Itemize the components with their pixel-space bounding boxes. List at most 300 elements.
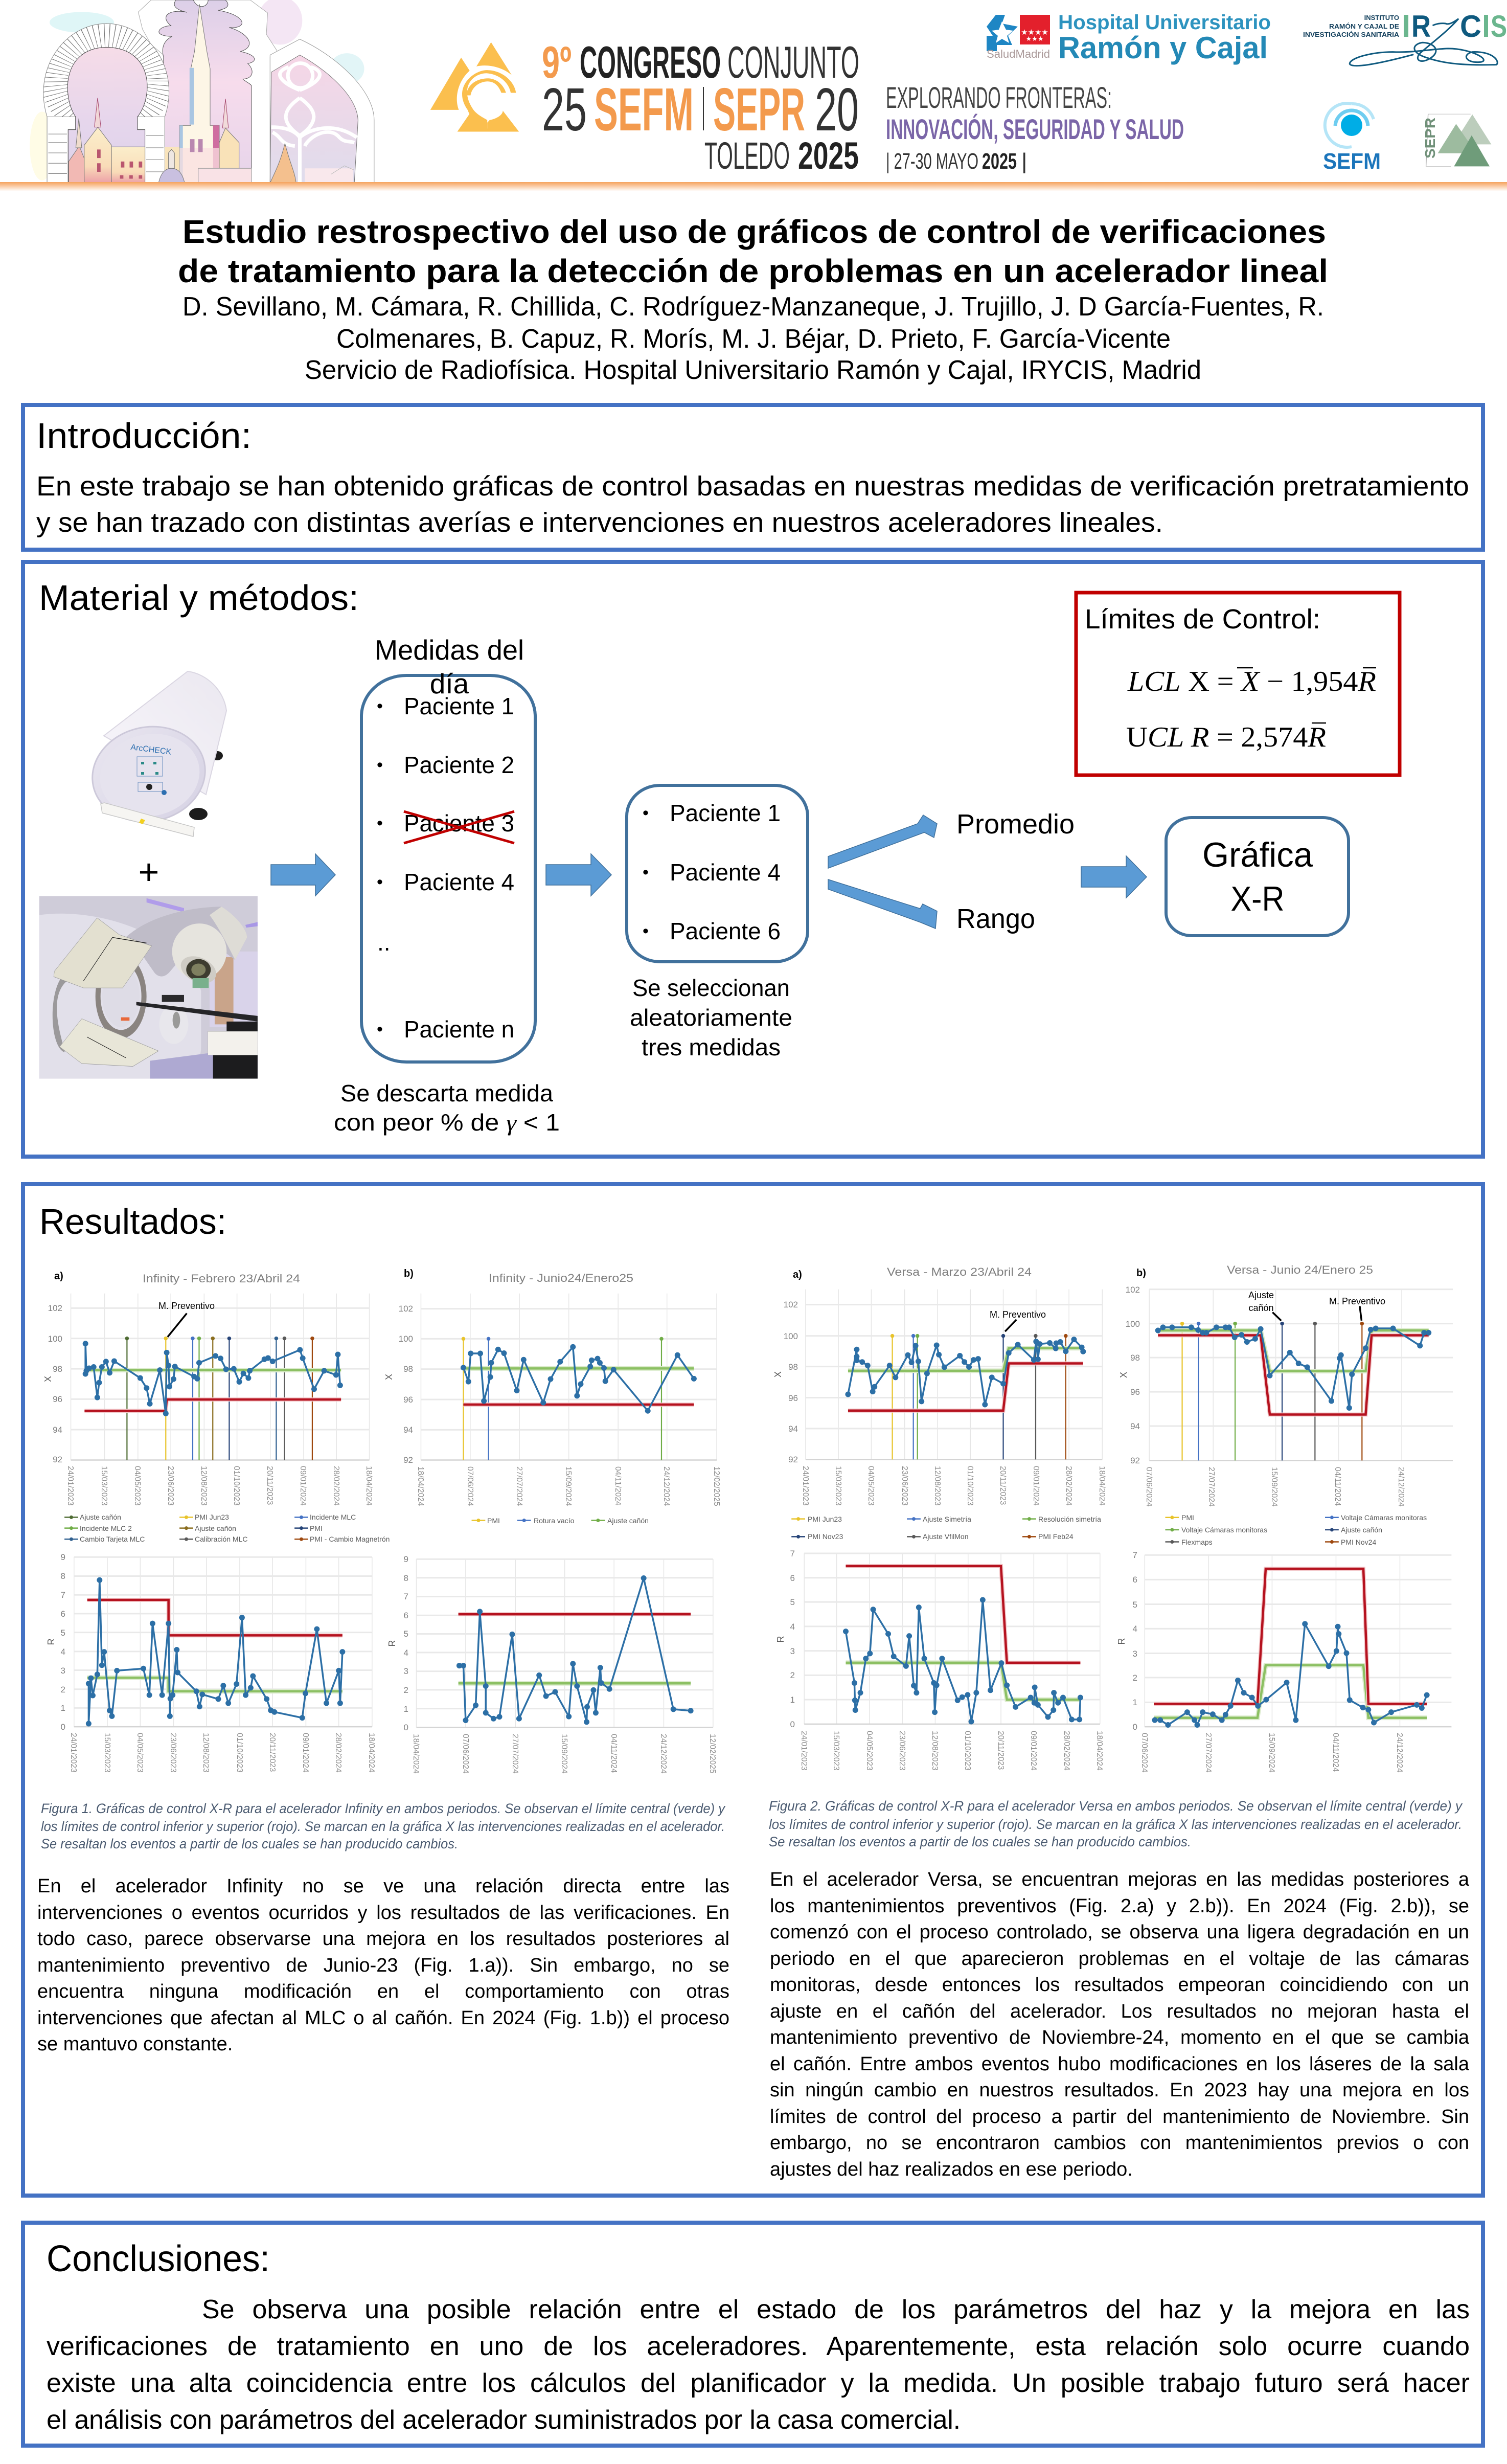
y axis labels <box>61 1552 65 1732</box>
panel letter: b) <box>1136 1268 1146 1279</box>
chart: Infinity R, febrero 23 / abril 24 <box>46 1552 376 1773</box>
logo: Hospital Ramón y Cajal: ★★★ <box>1026 35 1043 42</box>
text: introducción body: y se han trazado con distintas averías e intervenciones en nuestros aceleradores lineales. <box>36 507 1163 538</box>
caption: se descarta: con peor % de γ < 1 <box>334 1109 560 1136</box>
axis title: X <box>384 1374 394 1380</box>
x axis labels: 15/09/2024 <box>564 1466 573 1506</box>
congress theme: EXPLORANDO FRONTERAS: <box>886 81 1112 115</box>
plot <box>64 1294 370 1539</box>
plot <box>791 1290 1102 1536</box>
text: resultados Infinity: intervenciones que afectan al MLC o al cañón. En 2024 (Fig. 1.b)) el proceso <box>37 2007 729 2029</box>
axis title: R <box>775 1636 786 1642</box>
plot <box>74 1557 372 1727</box>
panel: conclusiones <box>23 2223 1483 2446</box>
chart title: Versa - Junio 24/Enero 25 <box>1227 1263 1373 1276</box>
x axis labels: 12/08/2023 <box>199 1466 208 1506</box>
y axis labels: 3 <box>790 1646 795 1656</box>
congress name <box>542 37 859 177</box>
text: resultados Infinity: intervenciones o eventos ocurridos y los resultados de las verificaciones. En <box>37 1902 729 1924</box>
congress theme <box>886 81 1184 174</box>
annotations: M. Preventivo <box>1329 1296 1385 1306</box>
orange divider band <box>0 182 1507 191</box>
caption: selección aleatoria <box>630 975 792 1060</box>
chart title: Infinity - Febrero 23/Abril 24 <box>143 1272 300 1285</box>
text: introducción body <box>36 471 1469 538</box>
authors <box>182 292 1324 385</box>
x axis labels: 07/06/2024 <box>1140 1733 1149 1773</box>
y axis labels: 98 <box>788 1362 798 1372</box>
caption: selección aleatoria: Se seleccionan <box>632 975 790 1001</box>
x axis labels: 12/08/2023 <box>201 1733 210 1773</box>
y axis labels: 0 <box>61 1722 65 1732</box>
caption: selección aleatoria: aleatoriamente <box>630 1004 792 1031</box>
x axis labels: 01/10/2023 <box>963 1731 972 1771</box>
y axis labels: 4 <box>61 1647 65 1657</box>
arrow: to rango <box>828 879 937 929</box>
x axis labels: 04/05/2023 <box>865 1731 874 1771</box>
x axis labels <box>416 1466 721 1506</box>
plot <box>417 1559 713 1727</box>
list items: Paciente 1 <box>404 693 514 719</box>
logo: IRYCIS: INSTITUTO <box>1364 14 1399 21</box>
x axis labels: 15/03/2023 <box>100 1466 108 1506</box>
x axis labels: 20/11/2023 <box>996 1731 1005 1770</box>
y axis labels: 96 <box>788 1393 798 1403</box>
legend: Cambio Tarjeta MLC <box>80 1535 145 1543</box>
legend: PMI Jun23 <box>195 1513 229 1521</box>
y axis labels: 92 <box>788 1455 798 1464</box>
legend: Rotura vacío <box>534 1517 575 1525</box>
list items: Paciente 2 <box>404 752 514 778</box>
y axis labels: 2 <box>61 1685 65 1694</box>
y axis labels: 100 <box>399 1334 413 1344</box>
legend: PMI Nov24 <box>1341 1538 1376 1546</box>
y axis labels: 3 <box>61 1666 65 1676</box>
logo: IRYCIS: C <box>1460 9 1481 43</box>
y axis labels: 92 <box>403 1455 413 1465</box>
x axis labels: 28/02/2024 <box>334 1733 342 1773</box>
x axis labels <box>800 1731 1104 1771</box>
x axis labels: 23/06/2023 <box>166 1466 175 1506</box>
congress name: CONJUNTO <box>727 37 859 87</box>
y axis labels: 6 <box>790 1573 795 1583</box>
icon: ArcCHECK phantom: ArcCHECK <box>130 743 172 757</box>
list items: .. <box>377 929 391 956</box>
label: rango: Rango <box>956 903 1035 934</box>
box: gráfica X-R: X-R <box>1231 879 1284 918</box>
plus sign: + <box>139 852 159 892</box>
caption: figura 1: Figura 1. Gráficas de control X-R para el acelerador Infinity en ambos periodos. Se observan el límite central (verde) y <box>41 1801 725 1816</box>
panel: introducción <box>23 405 1483 550</box>
y axis labels: 100 <box>784 1331 798 1341</box>
text: introducción body: En este trabajo se han obtenido gráficas de control basadas en nuestras medidas de verificación pretratamiento <box>36 471 1469 502</box>
y axis labels <box>404 1554 408 1732</box>
heading: resultados: Resultados: <box>39 1202 226 1241</box>
y axis labels: 1 <box>404 1704 408 1714</box>
caption: figura 1: los límites de control inferior y superior (rojo). Se marcan en la gráfica X las intervenciones realizadas en el acelerador. <box>41 1819 725 1834</box>
formula: UCL: UCL R = 2,574R <box>1126 721 1326 753</box>
list items: Paciente 4 <box>404 869 514 895</box>
caption: se descarta <box>334 1080 560 1136</box>
list: patient measurements <box>361 668 535 1062</box>
x axis labels: 04/05/2023 <box>866 1466 875 1506</box>
plot <box>421 1294 717 1521</box>
panel: resultados <box>23 1184 1483 2196</box>
logo: Hospital Ramón y Cajal: Hospital Universitario <box>1058 11 1271 34</box>
x axis labels: 18/04/2024 <box>416 1466 425 1506</box>
legend: Incidente MLC <box>310 1513 356 1521</box>
y axis labels <box>1126 1285 1140 1465</box>
text: conclusiones body: Se observa una posible relación entre el estado de los parámetros del haz y la mejora en las <box>202 2295 1470 2324</box>
y axis labels <box>48 1303 62 1464</box>
plot <box>804 1553 1100 1724</box>
x axis labels: 18/04/2024 <box>367 1733 376 1773</box>
y axis labels: 1 <box>1133 1698 1137 1707</box>
text: resultados Versa: límites de control del proceso a partir del mantenimiento de Noviembre. Sin <box>770 2106 1469 2127</box>
text: resultados Infinity: encuentra ninguna modificación en el comportamiento con otras <box>37 1981 729 2002</box>
logo: Hospital Ramón y Cajal: Ramón y Cajal <box>1058 31 1268 65</box>
y axis labels: 6 <box>61 1609 65 1619</box>
x axis labels: 27/07/2024 <box>511 1734 519 1774</box>
y axis labels: 92 <box>1130 1456 1140 1465</box>
icon: red cross over Paciente 3 <box>404 811 514 843</box>
y axis labels: 94 <box>1130 1421 1140 1431</box>
legend: Incidente MLC 2 <box>80 1524 132 1532</box>
y axis labels: 2 <box>1133 1673 1137 1683</box>
legend <box>80 1513 390 1543</box>
x axis labels <box>1140 1733 1404 1773</box>
congress name: SEFM <box>594 76 694 144</box>
illustration: Toledo skyline in gothic arches <box>30 0 374 183</box>
list items: Paciente 3 <box>404 810 514 837</box>
text: resultados Infinity: En el acelerador Infinity no se ve una relación directa entre las <box>37 1875 729 1897</box>
text: resultados Infinity: mantenimiento preventivo de Junio-23 (Fig. 1.a)). Sin embargo, no se <box>37 1954 729 1976</box>
x axis labels: 24/01/2023 <box>801 1466 810 1506</box>
y axis labels: 96 <box>53 1394 62 1404</box>
y axis labels: 94 <box>403 1425 413 1435</box>
text: resultados Versa: embargo, no se encontraron cambios con mantenimientos previos o con <box>770 2132 1469 2154</box>
x axis labels: 23/06/2023 <box>900 1466 909 1506</box>
legend: Voltaje Cámaras monitoras <box>1181 1526 1267 1534</box>
legend: Ajuste cañón <box>607 1517 649 1525</box>
authors: Colmenares, B. Capuz, R. Morís, M. J. Béjar, D. Prieto, F. García-Vicente <box>336 324 1171 354</box>
x axis labels: 04/11/2024 <box>613 1466 622 1506</box>
axis title: R <box>46 1638 56 1645</box>
legend: PMI - Cambio Magnetrón <box>310 1535 390 1543</box>
x axis labels: 24/12/2024 <box>1395 1733 1404 1773</box>
heading: material y métodos: Material y métodos: <box>39 578 359 618</box>
y axis labels: 4 <box>790 1622 795 1632</box>
y axis labels: 98 <box>53 1364 62 1374</box>
y axis labels: 3 <box>404 1666 408 1676</box>
congress theme: | <box>1021 149 1027 174</box>
y axis labels: 4 <box>404 1648 408 1658</box>
x axis labels: 04/11/2024 <box>1333 1467 1342 1506</box>
list items: Paciente n <box>404 1016 514 1043</box>
arrow <box>546 854 611 896</box>
y axis labels: 102 <box>1126 1285 1140 1295</box>
y axis labels: 96 <box>403 1395 413 1405</box>
annotation: M. Preventivo <box>158 1301 215 1311</box>
panel: material y métodos <box>23 562 1483 1157</box>
title <box>178 213 1328 289</box>
caption: figura 2: Se resaltan los eventos a partir de los cuales se han producido cambios. <box>769 1834 1191 1849</box>
x axis labels: 07/06/2024 <box>461 1734 470 1774</box>
caption: figura 2: Figura 2. Gráficas de control X-R para el acelerador Versa en ambos periodos. Se observan el límite central (verde) y <box>769 1798 1463 1814</box>
header banner <box>0 0 1507 191</box>
text: conclusiones body: existe una alta coincidencia entre los cálculos del planificador y la medida. Un posible trabajo futuro será hacer <box>47 2368 1470 2398</box>
title: de tratamiento para la detección de problemas en un acelerador lineal <box>178 253 1328 289</box>
panel letter: b) <box>404 1268 414 1279</box>
caption: figura 1: Se resaltan los eventos a partir de los cuales se han producido cambios. <box>41 1836 458 1851</box>
x axis labels: 12/08/2023 <box>930 1731 939 1771</box>
chart title: Infinity - Junio24/Enero25 <box>489 1272 633 1284</box>
y axis labels: 98 <box>1130 1353 1140 1363</box>
text: resultados Versa <box>770 1867 1470 2184</box>
legend <box>487 1517 649 1525</box>
legend: Resolución simetría <box>1038 1515 1101 1523</box>
x axis labels: 28/02/2024 <box>332 1466 340 1506</box>
heading: conclusiones: Conclusiones: <box>47 2239 270 2279</box>
logo: IRYCIS: INVESTIGACIÓN SANITARIA <box>1303 31 1400 38</box>
x axis labels: 04/05/2023 <box>135 1733 144 1773</box>
text: resultados Versa: monitoras, desde entonces los resultados empeoran coincidiendo con un <box>770 1974 1469 1996</box>
y axis labels: 100 <box>48 1334 62 1344</box>
logo: Hospital Ramón y Cajal: SaludMadrid <box>987 48 1050 60</box>
chart: Versa R, marzo 23 / abril 24 <box>775 1549 1104 1771</box>
x axis labels: 09/01/2024 <box>299 1466 307 1506</box>
x axis labels <box>412 1734 717 1774</box>
x axis labels: 24/01/2023 <box>69 1733 78 1773</box>
text: resultados Infinity <box>37 1873 730 2059</box>
list: selected patients: • <box>643 863 649 882</box>
y axis labels: 8 <box>61 1571 65 1581</box>
y axis labels: 1 <box>61 1703 65 1713</box>
list items <box>377 693 514 1043</box>
text: resultados Versa: el cañón. Entre ambos eventos hubo modificaciones en los láseres de la sala <box>770 2053 1469 2075</box>
y axis labels: 1 <box>790 1695 795 1705</box>
x axis labels: 09/01/2024 <box>301 1733 310 1773</box>
text: conclusiones body: el análisis con parámetros del acelerador suministrados por la casa comercial. <box>47 2405 961 2435</box>
y axis labels <box>790 1549 795 1729</box>
x axis labels: 20/11/2023 <box>998 1466 1007 1505</box>
chart: Versa R, junio 24 / enero 25 <box>1116 1550 1451 1773</box>
legend: PMI Nov23 <box>808 1532 843 1541</box>
legend: PMI Feb24 <box>1038 1532 1074 1541</box>
caption: figura 2 <box>769 1798 1463 1849</box>
y axis labels: 6 <box>1133 1575 1137 1585</box>
annotation: M. Preventivo <box>990 1309 1046 1320</box>
text: resultados Versa: mantenimiento preventivo de Noviembre-24, momento en el que se cambia <box>770 2027 1469 2048</box>
icon: ArcCHECK phantom <box>83 671 226 837</box>
y axis labels: 7 <box>404 1592 408 1601</box>
annotations: Ajuste <box>1248 1290 1274 1300</box>
x axis labels: 15/09/2024 <box>1270 1467 1278 1507</box>
x axis labels: 24/12/2024 <box>662 1466 671 1506</box>
y axis labels: 0 <box>790 1720 795 1729</box>
arrow: to promedio <box>828 815 937 868</box>
text: resultados Versa: los mantenimientos preventivos (Fig. 2.a) y 2.b)). En 2024 (Fig. 2.b)), se <box>770 1895 1469 1916</box>
congress theme: | 27-30 MAYO <box>886 149 978 174</box>
y axis labels: 9 <box>404 1554 408 1564</box>
text: resultados Versa: periodo en el que aparecieron problemas en el voltaje de las cámaras <box>770 1948 1469 1970</box>
y axis labels: 0 <box>404 1723 408 1732</box>
x axis labels: 28/02/2024 <box>1064 1466 1073 1506</box>
chart: Infinity X, junio 24 / enero 25 <box>384 1268 721 1525</box>
list: selected patients <box>627 785 808 962</box>
y axis labels: 2 <box>404 1685 408 1695</box>
x axis labels <box>66 1466 373 1506</box>
y axis labels: 94 <box>788 1424 798 1434</box>
x axis labels: 18/04/2024 <box>1095 1731 1104 1771</box>
y axis labels: 100 <box>1126 1319 1140 1329</box>
arrow <box>271 854 335 896</box>
chart: Infinity X, febrero 23 / abril 24 <box>43 1271 390 1543</box>
congress name: 2025 <box>798 134 859 177</box>
axis title: X <box>1118 1372 1129 1378</box>
text: resultados Versa: sin ningún cambio en nuestros resultados. En 2023 hay una mejora en los <box>770 2079 1469 2101</box>
chart: Versa X, marzo 23 / abril 24 <box>773 1265 1106 1541</box>
formula: LCL: LCL X = X − 1,954R <box>1127 666 1376 697</box>
axis title: X <box>773 1371 783 1377</box>
plot <box>1145 1555 1451 1727</box>
y axis labels: 102 <box>784 1300 798 1309</box>
y axis labels: 5 <box>404 1629 408 1639</box>
x axis labels: 12/08/2023 <box>933 1466 942 1506</box>
chart: Versa X, junio 24 / enero 25 <box>1118 1263 1453 1546</box>
x axis labels: 27/07/2024 <box>1204 1733 1213 1773</box>
congress theme: INNOVACIÓN, SEGURIDAD Y SALUD <box>886 113 1184 145</box>
arrow <box>1081 856 1147 898</box>
list items: • <box>377 696 383 716</box>
congress theme: 2025 <box>982 149 1017 174</box>
x axis labels: 18/04/2024 <box>364 1466 373 1506</box>
text: resultados Versa: ajuste en el cañón del acelerador. Los resultados no mejoran hasta el <box>770 2000 1469 2022</box>
x axis labels: 15/09/2024 <box>560 1734 568 1774</box>
y axis labels <box>399 1304 413 1465</box>
congress logo <box>430 42 519 131</box>
list: selected patients: Paciente 1 <box>670 800 781 826</box>
caption: figura 1 <box>41 1801 725 1851</box>
logo: SEPR: SEPR <box>1422 118 1438 159</box>
authors: Servicio de Radiofísica. Hospital Universitario Ramón y Cajal, IRYCIS, Madrid <box>305 355 1201 385</box>
y axis labels <box>1133 1550 1137 1732</box>
legend: PMI <box>310 1524 323 1532</box>
caption: se descarta: Se descarta medida <box>340 1080 553 1106</box>
y axis labels: 5 <box>61 1628 65 1638</box>
congress name: 25 <box>542 76 587 144</box>
y axis labels: 7 <box>61 1590 65 1600</box>
y axis labels: 98 <box>403 1364 413 1374</box>
x axis labels: 20/11/2023 <box>268 1733 277 1772</box>
x axis labels <box>801 1466 1106 1506</box>
x axis labels: 15/09/2024 <box>1267 1733 1276 1773</box>
axis title: X <box>43 1376 53 1382</box>
list items: • <box>377 813 383 833</box>
x axis labels: 04/11/2024 <box>1331 1733 1340 1772</box>
y axis labels: 4 <box>1133 1624 1137 1634</box>
x axis labels: 07/06/2024 <box>466 1466 474 1506</box>
plot <box>1149 1290 1453 1542</box>
x axis labels: 23/06/2023 <box>169 1733 177 1773</box>
box: límites de control <box>1076 593 1400 775</box>
y axis labels: 92 <box>53 1455 62 1464</box>
panel letter: a) <box>793 1269 802 1280</box>
x axis labels: 15/03/2023 <box>832 1731 840 1771</box>
label: promedio: Promedio <box>956 809 1075 840</box>
legend <box>808 1515 1101 1541</box>
x axis labels: 24/01/2023 <box>800 1731 808 1771</box>
caption: selección aleatoria: tres medidas <box>642 1034 781 1060</box>
axis title: R <box>387 1640 397 1646</box>
logo: Hospital Ramón y Cajal: ★★★★ <box>1021 28 1048 37</box>
x axis labels: 24/12/2024 <box>1397 1467 1405 1507</box>
x axis labels: 18/04/2024 <box>412 1734 420 1774</box>
x axis labels: 15/03/2023 <box>103 1733 111 1773</box>
list: selected patients: Paciente 4 <box>670 859 781 886</box>
x axis labels: 24/12/2024 <box>659 1734 668 1774</box>
caption: figura 2: los límites de control inferior y superior (rojo). Se marcan en la gráfica X las intervenciones realizadas en el acelerador. <box>769 1817 1462 1832</box>
y axis labels: 6 <box>404 1611 408 1620</box>
annotations <box>1248 1290 1385 1313</box>
logo: Hospital Ramón y Cajal <box>987 11 1271 65</box>
axis title: R <box>1116 1638 1127 1644</box>
y axis labels: 8 <box>404 1573 408 1583</box>
y axis labels: 5 <box>1133 1600 1137 1610</box>
x axis labels: 28/02/2024 <box>1062 1731 1071 1771</box>
x axis labels: 01/10/2023 <box>966 1466 974 1506</box>
legend: PMI Jun23 <box>808 1515 842 1523</box>
title: Estudio restrospectivo del uso de gráficos de control de verificaciones <box>182 213 1326 250</box>
text: resultados Versa: comenzó con el proceso controlado, se observa una ligera degradación en un <box>770 1922 1469 1943</box>
legend: Ajuste Simetría <box>923 1515 971 1523</box>
list: selected patients: • <box>643 803 649 823</box>
y axis labels: 0 <box>1133 1722 1137 1732</box>
congress name: SEPR <box>713 76 805 144</box>
logo: IRYCIS <box>1303 9 1507 66</box>
x axis labels: 23/06/2023 <box>898 1731 906 1771</box>
x axis labels: 18/04/2024 <box>1098 1466 1106 1506</box>
x axis labels: 27/07/2024 <box>515 1466 523 1506</box>
legend: PMI <box>487 1517 500 1525</box>
text: resultados Versa: ajustes del haz realizados en ese periodo. <box>770 2159 1133 2180</box>
list items: • <box>377 1020 383 1039</box>
box: gráfica X-R <box>1166 818 1349 936</box>
text: resultados Infinity: se mantuvo constante. <box>37 2033 233 2055</box>
x axis labels: 04/05/2023 <box>133 1466 142 1506</box>
chart title: Versa - Marzo 23/Abril 24 <box>887 1265 1032 1278</box>
x axis labels: 04/11/2024 <box>609 1734 618 1773</box>
heading: medidas del día: Medidas del <box>375 634 524 666</box>
x axis labels: 12/02/2025 <box>708 1734 717 1774</box>
x axis labels <box>69 1733 376 1773</box>
legend: Ajuste VfilMon <box>923 1532 968 1541</box>
congress name: 20 <box>815 76 859 144</box>
x axis labels: 09/01/2024 <box>1032 1466 1040 1506</box>
annotations: cañón <box>1248 1303 1274 1313</box>
logo: SEPR <box>1422 114 1491 166</box>
legend: Ajuste cañón <box>1341 1526 1382 1534</box>
x axis labels: 01/10/2023 <box>232 1466 241 1506</box>
text: resultados Infinity: todo caso, parece observarse una mejora en los resultados posteriores al <box>37 1928 729 1950</box>
y axis labels: 102 <box>399 1304 413 1314</box>
y axis labels: 7 <box>1133 1550 1137 1560</box>
y axis labels: 102 <box>48 1303 62 1313</box>
list items: • <box>377 755 383 775</box>
congress name: TOLEDO <box>704 134 790 177</box>
legend: Ajuste cañón <box>80 1513 121 1521</box>
logo: SEFM: SEFM <box>1323 149 1381 174</box>
